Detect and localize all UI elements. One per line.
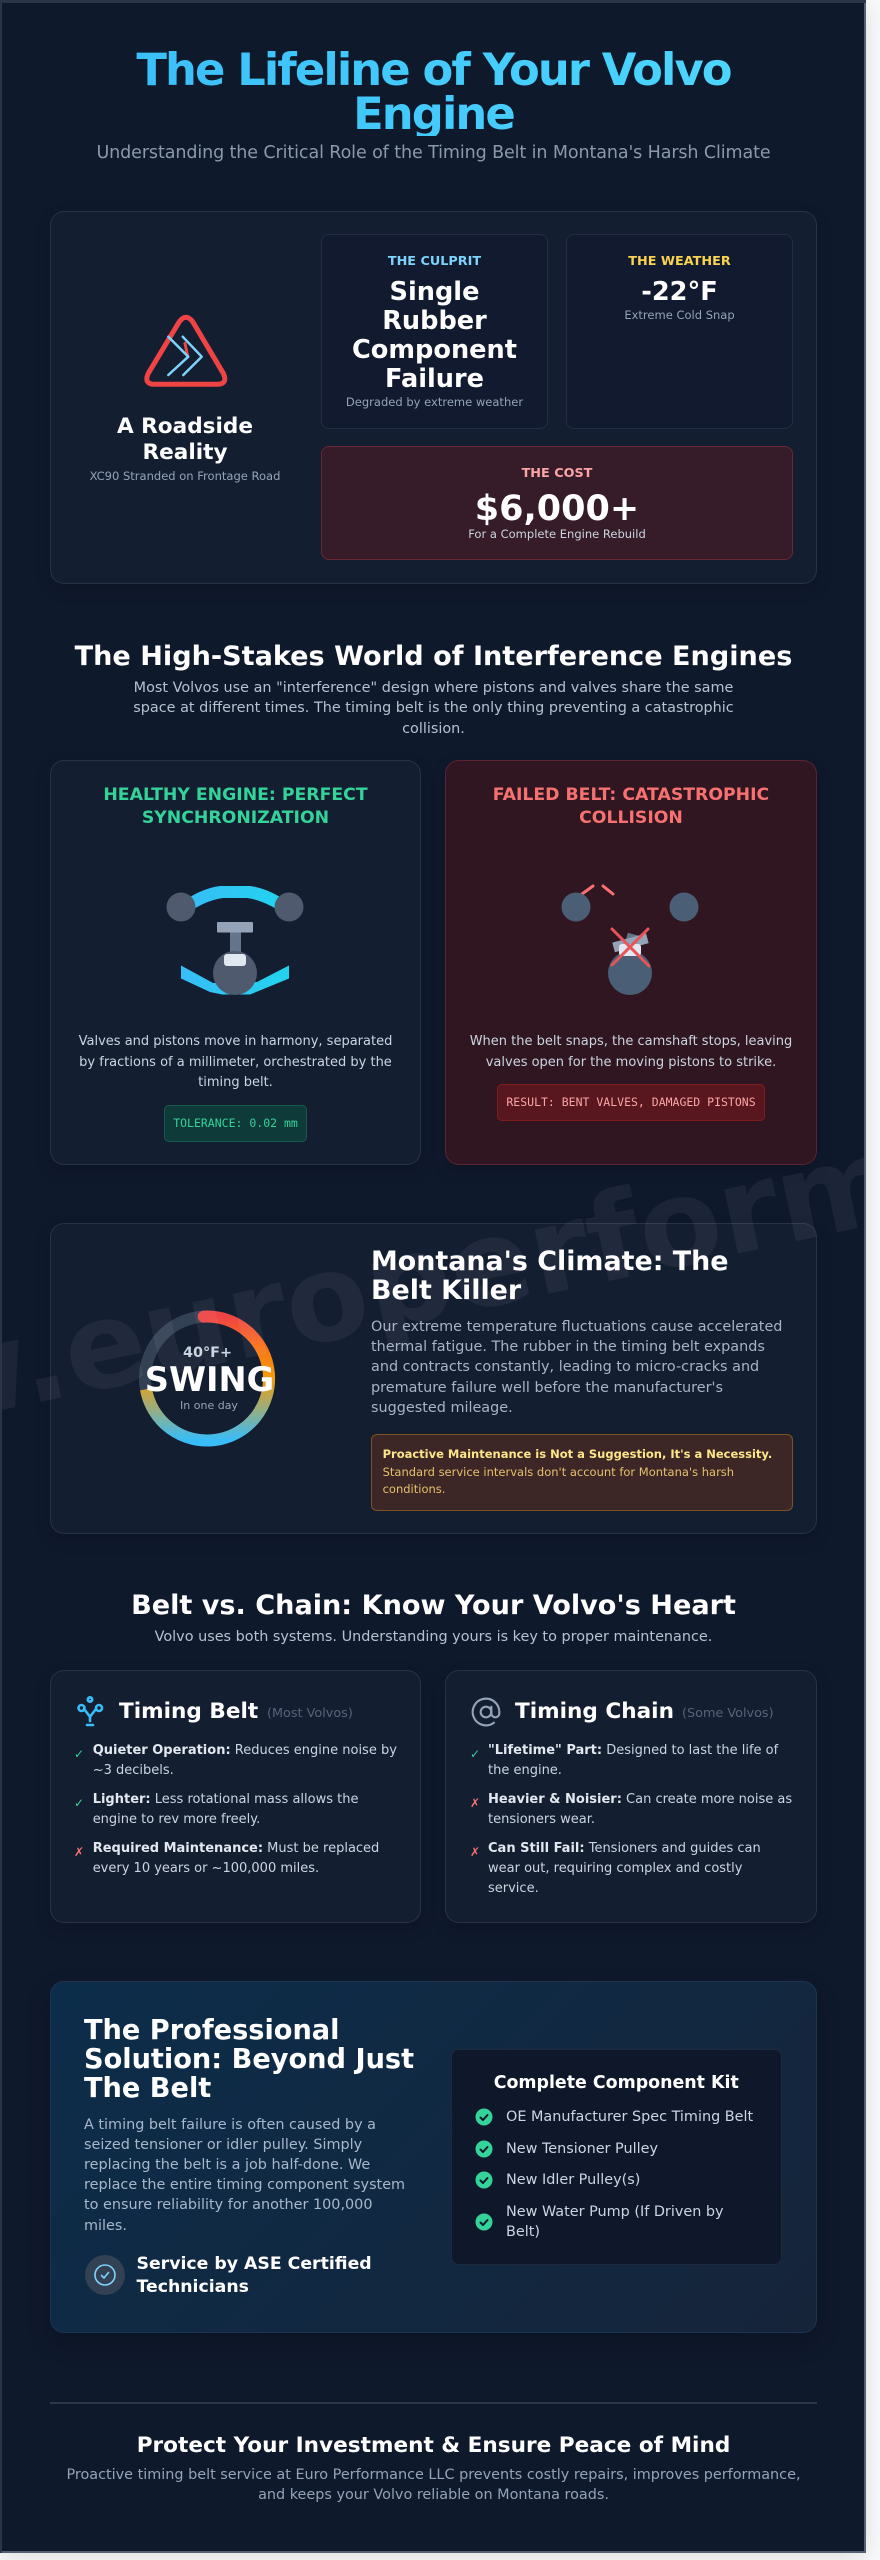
heading: a roadside reality: A Roadside [117,414,253,439]
body text: seized tensioner or idler pulley. Simply [84,2137,362,2153]
footer text: and keeps your Volvo reliable on Montana roads. [258,2487,609,2503]
mark: check: ✓ [470,1747,480,1761]
note: For a Complete Engine Rebuild [468,527,646,541]
body text [371,1319,782,1416]
ring value: 40F+: 40°F+ [183,1345,232,1361]
body text: and contracts constantly, leading to micro-cracks and [371,1359,759,1375]
kit item [476,2108,753,2126]
text: New Tensioner Pulley [506,2141,658,2157]
list item [93,1742,397,1778]
certification text: Technicians [136,2276,249,2296]
list item: Quieter Operation: Reduces engine noise by [93,1742,397,1758]
heading: COLLISION [579,808,683,828]
text: New Water Pump (If Driven by [506,2204,724,2220]
intro text: space at different times. The timing belt is the only thing preventing a catastrophic [133,700,734,716]
panel: healthy engine [50,760,421,1165]
chart: temperature swing ring [139,1310,276,1446]
list item: every 10 years or ~100,000 miles. [93,1861,319,1876]
title: The Lifeline of Your Volvo [136,42,731,96]
intro text: Volvo uses both systems. Understanding yours is key to proper maintenance. [155,1629,712,1645]
description: timing belt. [198,1075,273,1090]
heading: Solution: Beyond Just [84,2044,414,2074]
footer text [66,2467,801,2503]
body text: premature failure well before the manufacturer's [371,1380,723,1396]
value: $6,000+ [475,489,639,529]
kit item [476,2140,658,2158]
heading: Belt Killer [371,1274,521,1306]
panel: timing belt [50,1670,421,1923]
kit title: Complete Component Kit [494,2073,739,2093]
title: Engine [353,86,514,140]
body text: A timing belt failure is often caused by a [84,2117,376,2133]
panel: the cost [321,446,793,560]
list item: wear out, requiring complex and costly [488,1861,742,1876]
kit item [476,2172,640,2188]
panel: failed belt [445,760,817,1165]
diagram: synchronized engine [166,886,304,995]
badge: result: RESULT: BENT VALVES, DAMAGED PISTONS [506,1095,756,1109]
heading: a roadside reality [117,414,253,465]
diagram: collision [562,884,698,995]
panel: the culprit [321,234,548,429]
text: New Idler Pulley(s) [506,2172,640,2188]
body text [84,2117,405,2234]
callout text: Proactive Maintenance is Not a Suggestion, It's a Necessity. [383,1447,772,1461]
title: Timing Belt [119,1698,258,1724]
body text: thermal fatigue. The rubber in the timing belt expands [371,1339,765,1355]
intro text [133,680,734,736]
icon: check [476,2214,492,2230]
title: Timing Chain [515,1698,674,1724]
ring caption: In one day [180,1399,238,1412]
list item: the engine. [488,1763,562,1778]
body text: to ensure reliability for another 100,000 [84,2197,372,2213]
panel: roadside reality [50,211,817,584]
intro text: Most Volvos use an "interference" design where pistons and valves share the same [134,680,733,696]
title [60,48,807,136]
heading [493,784,769,828]
icon: check [476,2140,492,2158]
footer heading: Protect Your Investment & Ensure Peace of Mind [137,2433,730,2458]
icon: timing belt [77,1696,104,1726]
ring value: swing: SWING [145,1360,274,1399]
label: THE CULPRIT [388,254,481,269]
mark: check: ✓ [74,1796,84,1810]
body text: replacing the belt is a job half-done. We [84,2157,370,2173]
description: valves open for the moving pistons to strike. [486,1055,776,1070]
list item: Can Still Fail: Tensioners and guides can [488,1840,761,1856]
subtitle: (Some Volvos) [682,1706,774,1721]
caption: xc90 stranded: XC90 Stranded on Frontage Road [90,469,280,483]
certification text [136,2254,372,2296]
list item: Lighter: Less rotational mass allows the [93,1792,358,1806]
list item [488,1742,778,1778]
icon: timing chain [472,1698,500,1726]
description: When the belt snaps, the camshaft stops, leaving [470,1034,792,1049]
heading [103,784,368,828]
text [506,2204,724,2240]
footer text: Proactive timing belt service at Euro Performance LLC prevents costly repairs, improves performance, [66,2467,801,2483]
icon: check [476,2108,492,2126]
heading: The Belt [84,2072,211,2104]
value: Rubber [382,306,487,336]
panel: professional solution [50,1981,817,2333]
badge: tolerance: TOLERANCE: 0.02 mm [173,1116,298,1130]
heading: HEALTHY ENGINE: PERFECT [103,784,368,804]
mark: cross: ✗ [470,1845,480,1859]
mark: check: ✓ [74,1747,84,1761]
heading: belt vs chain: Belt vs. Chain: Know Your Volvo's Heart [131,1590,736,1621]
description [78,1034,392,1090]
subtitle: (Most Volvos) [267,1706,353,1721]
panel: the weather [566,234,793,429]
intro text: collision. [402,720,465,736]
note: Extreme Cold Snap [624,308,735,322]
icon: warning triangle with belt chevrons [144,314,228,387]
text: OE Manufacturer Spec Timing Belt [506,2109,753,2125]
badge: result [497,1084,765,1121]
body text: replace the entire timing component system [84,2177,405,2193]
callout: proactive maintenance [371,1434,793,1511]
text: Belt) [506,2224,540,2240]
body text: miles. [84,2218,127,2234]
description: Valves and pistons move in harmony, separated [79,1034,392,1049]
list item: "Lifetime" Part: Designed to last the life of [488,1742,778,1758]
list item: service. [488,1881,539,1896]
note: Degraded by extreme weather [346,395,523,409]
certification text: Service by ASE Certified [136,2254,372,2274]
mark: cross: ✗ [470,1796,480,1810]
value [352,277,517,394]
callout text [383,1447,772,1496]
panel: timing chain [445,1670,817,1923]
callout text: conditions. [383,1482,445,1496]
heading: The Professional [84,2014,339,2046]
value: Component [352,335,517,365]
panel: component kit [451,2049,782,2265]
heading: a roadside reality: Reality [142,440,228,465]
list item [488,1840,761,1896]
mark: cross: ✗ [74,1845,84,1859]
heading: interference engines: The High-Stakes World of Interference Engines [75,640,792,672]
list item [488,1792,792,1827]
heading: FAILED BELT: CATASTROPHIC [493,784,769,804]
body text: Our extreme temperature fluctuations cause accelerated [371,1319,782,1335]
heading [84,2014,414,2104]
value: Failure [385,364,484,394]
description: by fractions of a millimeter, orchestrated by the [79,1055,392,1070]
icon: check [476,2172,492,2188]
heading: SYNCHRONIZATION [142,808,329,828]
list item: engine to rev more freely. [93,1812,260,1827]
label: THE WEATHER [628,254,731,269]
heading [371,1246,729,1306]
panel: montana climate [50,1223,817,1534]
list item: Required Maintenance: Must be replaced [93,1840,379,1856]
kit item [476,2204,724,2240]
label: THE COST [522,466,592,481]
list item [93,1840,379,1876]
badge: tolerance [164,1105,307,1142]
list item: ~3 decibels. [93,1763,174,1778]
description [470,1034,792,1070]
list item: tensioners wear. [488,1812,595,1827]
icon: certified badge [84,2255,124,2295]
heading: Montana's Climate: The [371,1246,729,1276]
body text: suggested mileage. [371,1400,513,1416]
list item: Heavier & Noisier: Can create more noise as [488,1792,792,1806]
value: -22°F [641,277,718,307]
subtitle: Understanding the Critical Role of the Timing Belt in Montana's Harsh Climate [96,143,771,163]
list item [93,1792,358,1827]
value: Single [390,277,479,307]
callout text: Standard service intervals don't account for Montana's harsh [383,1465,734,1479]
